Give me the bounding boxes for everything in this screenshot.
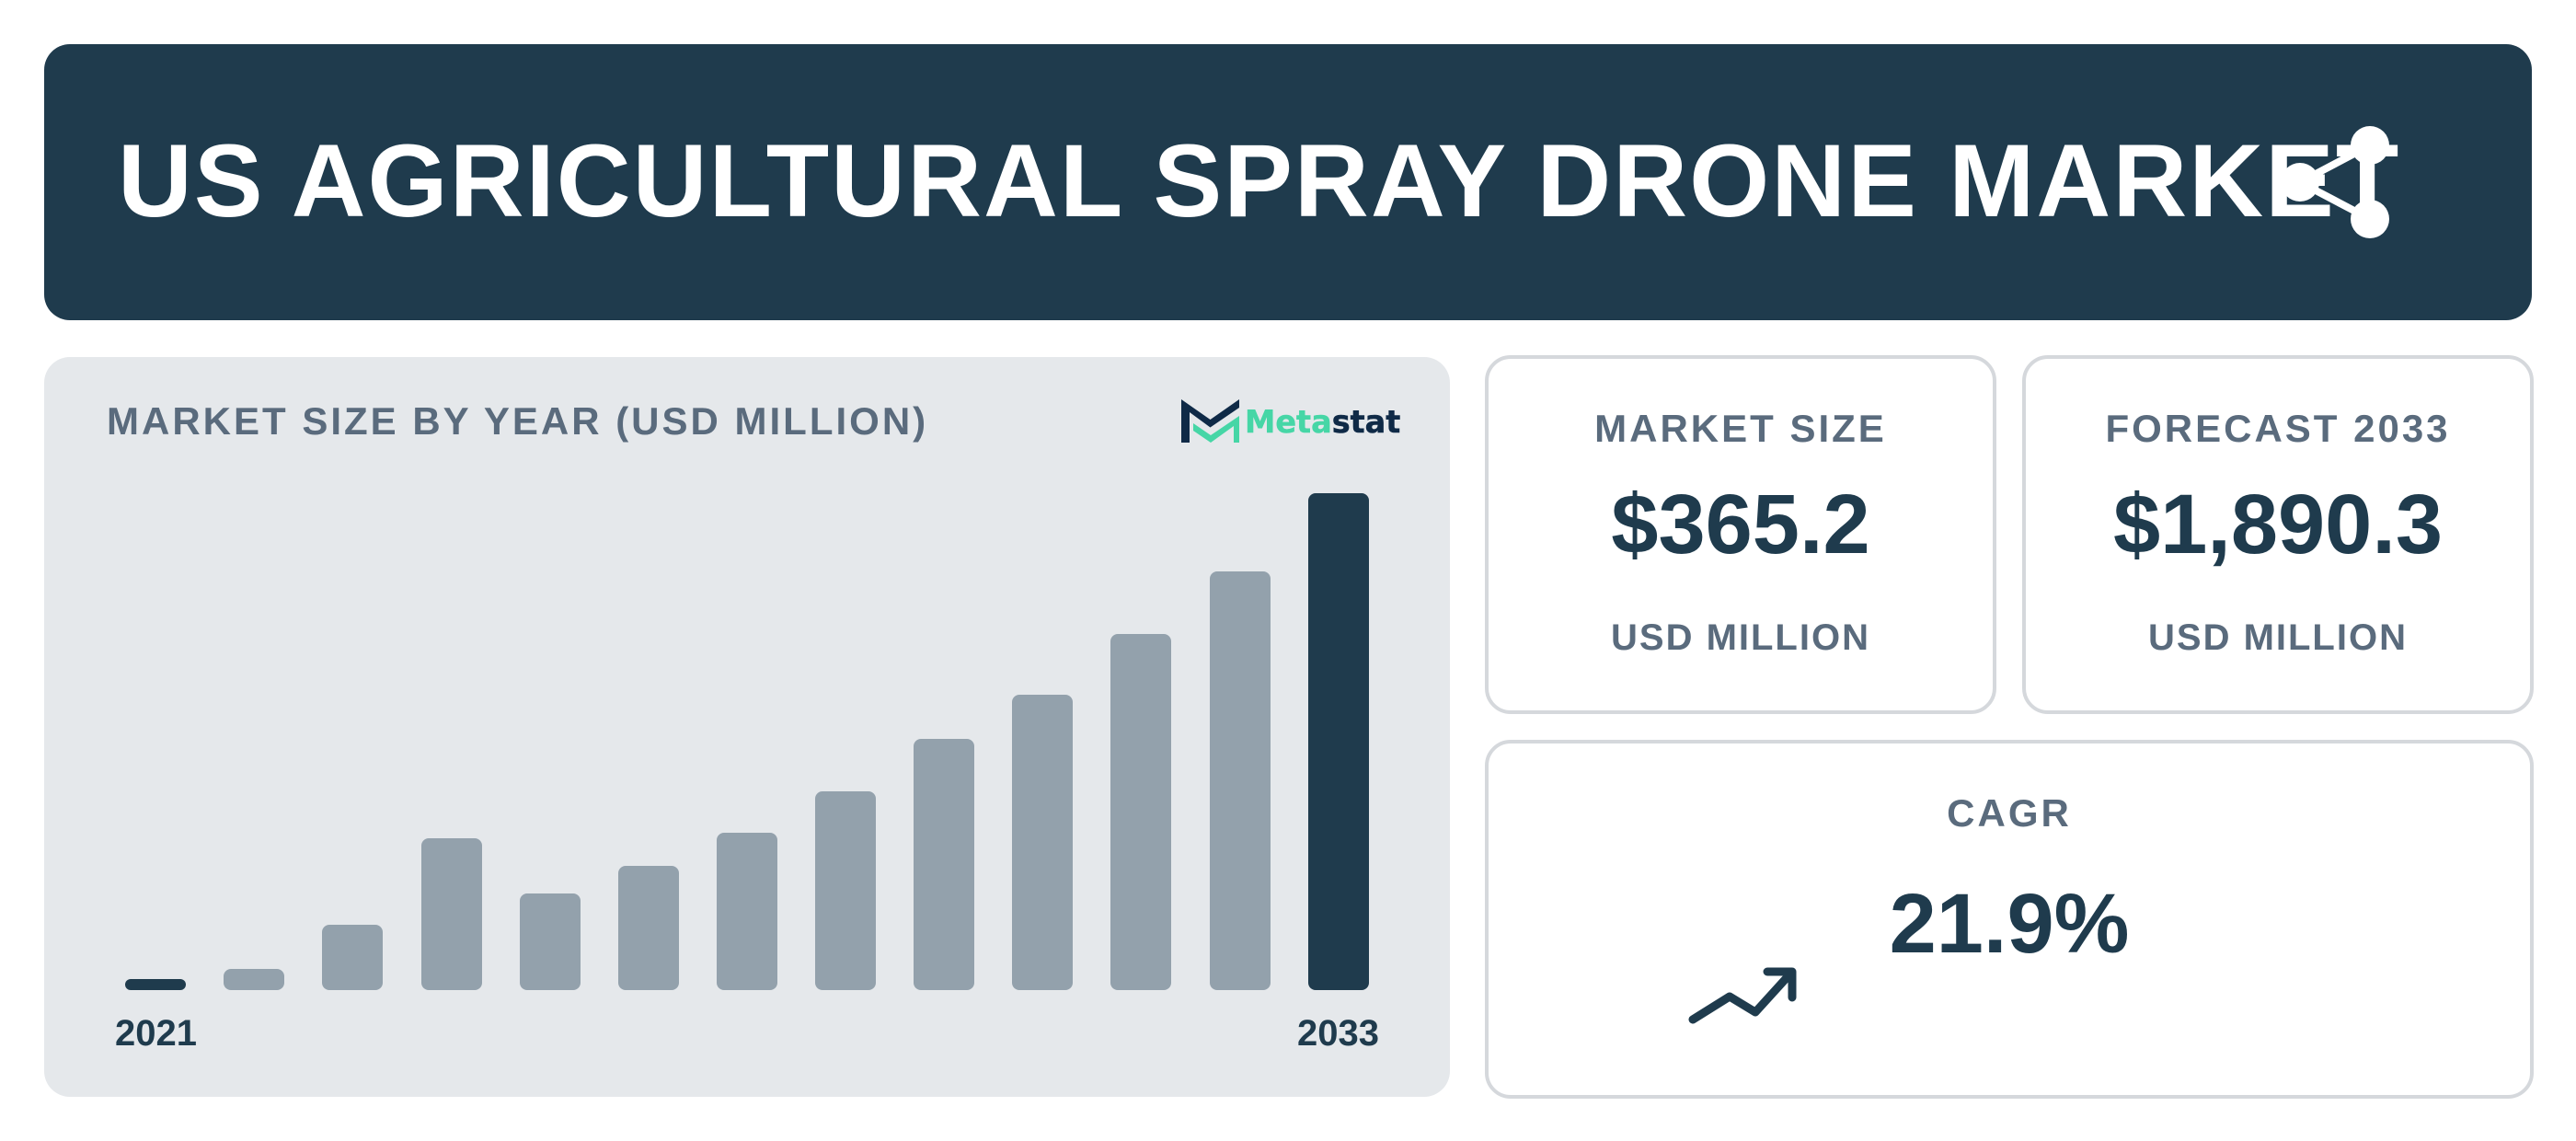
axis label: 2021: 2021 — [115, 1013, 197, 1054]
card value: $365.2 — [1611, 478, 1870, 571]
card value: $1,890.3 — [2113, 478, 2443, 571]
panel: market size by year — [44, 357, 1450, 1097]
card label: MARKET SIZE — [1594, 407, 1887, 450]
bar chart — [125, 493, 1369, 990]
logo: Metastat — [1181, 399, 1400, 443]
logo mark — [1181, 399, 1239, 443]
card: market size — [1485, 355, 1996, 714]
title: US AGRICULTURAL SPRAY DRONE MARKET — [118, 123, 2400, 238]
chart heading: MARKET SIZE BY YEAR (USD MILLION) — [107, 399, 928, 443]
axis label: 2033: 2033 — [1297, 1013, 1379, 1054]
icon: trend arrow — [1689, 968, 1796, 1023]
card label: CAGR — [1947, 791, 2072, 835]
card: CAGR — [1485, 740, 2534, 1099]
card label: FORECAST 2033 — [2105, 407, 2451, 450]
icon: share network — [2287, 126, 2389, 238]
header banner — [44, 44, 2532, 320]
card unit: USD MILLION — [1611, 617, 1870, 658]
logo wordmark: Metastat — [1245, 404, 1400, 440]
card value: 21.9% — [1890, 877, 2129, 971]
card unit: USD MILLION — [2148, 617, 2408, 658]
card: forecast 2033 — [2022, 355, 2534, 714]
